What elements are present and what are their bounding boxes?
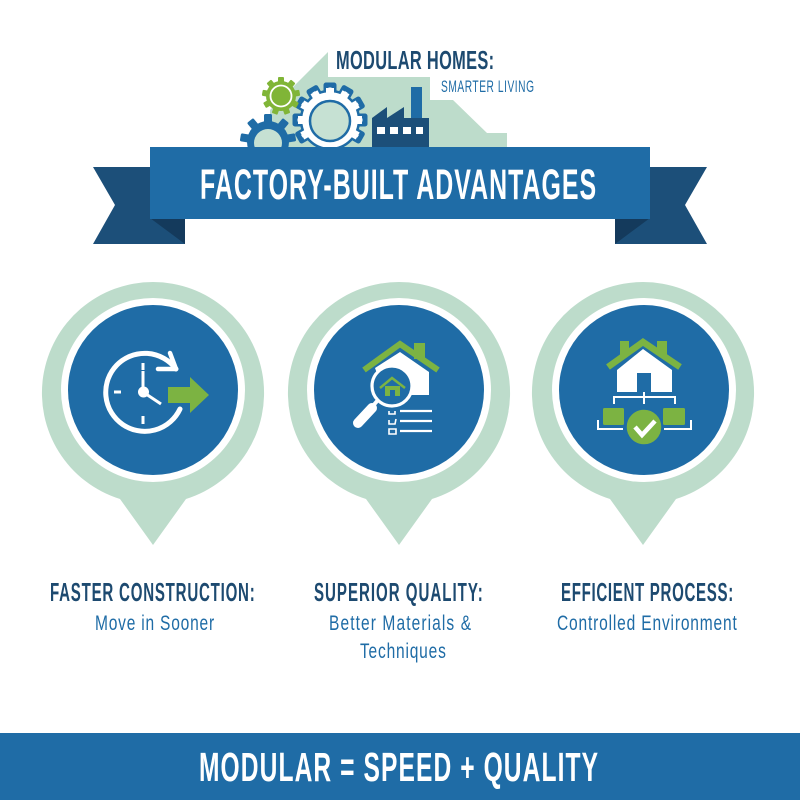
panel: efficient process pin [532, 282, 754, 545]
caption text line 1: Better Materials & [329, 611, 472, 635]
pin blue disc [314, 305, 484, 475]
panel: superior quality pin [288, 282, 510, 545]
title: FACTORY-BUILT ADVANTAGES [200, 161, 596, 209]
subheading: Smarter Living: SMARTER LIVING [441, 76, 534, 96]
mint background shape [270, 52, 507, 150]
icon: green gear [262, 77, 300, 115]
caption text: Move in Sooner [95, 611, 214, 635]
caption heading: SUPERIOR QUALITY: [314, 578, 483, 607]
caption heading: FASTER CONSTRUCTION: [50, 578, 255, 607]
pin white ring [552, 298, 736, 482]
caption: faster construction [50, 578, 255, 635]
caption text line 2: Techniques [360, 639, 446, 663]
pin white ring [61, 298, 245, 482]
ribbon banner [93, 147, 707, 244]
icon: house inspection [358, 343, 438, 434]
panel: faster construction pin [42, 282, 264, 545]
pin white ring [307, 298, 491, 482]
right ribbon tail [615, 167, 707, 244]
right fold [615, 218, 650, 244]
ribbon main band [150, 147, 650, 219]
footer text: MODULAR = SPEED + QUALITY [199, 745, 598, 791]
header graphic: gears and factory [240, 52, 507, 163]
left ribbon tail [93, 167, 185, 244]
left fold [150, 218, 185, 244]
caption heading: EFFICIENT PROCESS: [561, 578, 733, 607]
icon: large white gear [295, 85, 365, 149]
footer bar [0, 733, 800, 800]
icon: factory [372, 87, 429, 150]
pin blue disc [559, 305, 729, 475]
pin shape [42, 282, 264, 545]
icon: blue gear [240, 114, 296, 163]
caption: superior quality [314, 578, 483, 663]
heading: Modular Homes: MODULAR HOMES: [336, 45, 494, 75]
caption: efficient process [557, 578, 737, 635]
icon: clock with arrow [106, 353, 209, 431]
pin blue disc [68, 305, 238, 475]
icon: house workflow [598, 341, 691, 445]
caption text: Controlled Environment [557, 611, 737, 635]
pin shape [532, 282, 754, 545]
pin shape [288, 282, 510, 545]
